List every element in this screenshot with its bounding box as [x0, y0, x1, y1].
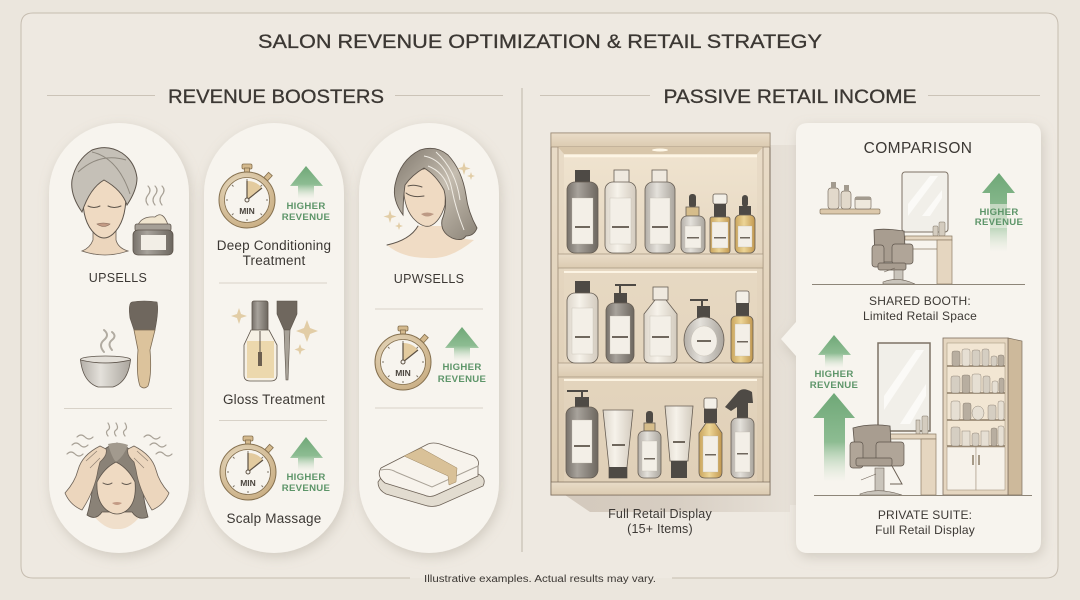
icon: stopwatch three	[375, 326, 431, 390]
icon: higher revenue arrow one: REVENUE	[282, 212, 331, 223]
icon: higher revenue arrow one: HIGHER	[286, 201, 326, 212]
icon: higher revenue arrow upper, private suite	[810, 335, 859, 391]
label: upsells variant: UPWSELLS	[394, 272, 464, 286]
label: shared booth: SHARED BOOTH:	[869, 294, 971, 308]
panel: comparison	[781, 123, 1041, 553]
heading: passive retail income: PASSIVE RETAIL INCOME	[664, 86, 916, 108]
retail shelf display	[551, 133, 770, 495]
icon: stopwatch two: MIN	[240, 478, 256, 488]
label: full retail display: Full Retail Display	[608, 507, 712, 521]
icon: higher revenue arrow three	[438, 327, 487, 385]
panel: upsells column three	[359, 123, 499, 553]
icon: stopwatch two	[220, 436, 276, 500]
products: top shelf	[567, 170, 755, 253]
label: gloss treatment: Gloss Treatment	[223, 392, 325, 407]
label: shared booth	[863, 294, 977, 323]
label: deep conditioning: Deep Conditioning	[217, 238, 331, 253]
icon: higher revenue arrow two	[282, 437, 331, 494]
icon: scalp massage	[65, 423, 172, 529]
label: upsells: UPSELLS	[89, 271, 147, 285]
title: SALON REVENUE OPTIMIZATION & RETAIL STRATEGY	[258, 31, 822, 53]
icon: stopwatch one: MIN	[239, 206, 255, 216]
label: private suite: Full Retail Display	[875, 523, 975, 537]
icon: higher revenue arrow, shared booth: REVENUE	[975, 217, 1024, 228]
label: shared booth: Limited Retail Space	[863, 309, 977, 323]
panel: treatments column two	[204, 123, 344, 553]
icon: higher revenue arrow one	[282, 166, 331, 223]
heading: revenue boosters: REVENUE BOOSTERS	[168, 86, 384, 108]
label: full retail display	[608, 507, 712, 536]
icon: higher revenue arrow three: HIGHER	[442, 362, 482, 373]
retail cabinet	[943, 338, 1022, 495]
icon: higher revenue arrow, shared booth: HIGHER	[979, 207, 1019, 218]
scene: shared booth	[812, 172, 1025, 284]
icon: higher revenue arrow upper, private suite: REVENUE	[810, 380, 859, 391]
label: private suite	[875, 508, 975, 537]
icon: woman with towel turban	[72, 148, 173, 255]
icon: stopwatch three: MIN	[395, 368, 411, 378]
products: middle shelf	[567, 281, 753, 363]
icon: higher revenue arrow two: HIGHER	[286, 472, 326, 483]
panel: treatments column two: Treatment	[243, 253, 305, 268]
icon: gloss bottle and tint brush	[231, 301, 318, 381]
scene: private suite	[814, 338, 1032, 496]
icon: higher revenue arrow upper, private suite: HIGHER	[814, 369, 854, 380]
label: full retail display: (15+ Items)	[627, 522, 693, 536]
heading: comparison: COMPARISON	[864, 140, 972, 157]
icon: tall higher revenue arrow	[813, 393, 855, 482]
footer note: Illustrative examples. Actual results may vary.	[424, 574, 656, 585]
icon: higher revenue arrow three: REVENUE	[438, 374, 487, 385]
icon: folded towel	[378, 443, 484, 506]
label: scalp massage: Scalp Massage	[227, 511, 321, 526]
products: bottom shelf	[566, 389, 754, 478]
icon: stopwatch one	[219, 164, 275, 228]
shelf shadow	[565, 145, 798, 512]
label: private suite: PRIVATE SUITE:	[878, 508, 972, 522]
icon: bowl and brush	[80, 301, 158, 388]
icon: higher revenue arrow, shared booth	[975, 173, 1024, 252]
icon: higher revenue arrow two: REVENUE	[282, 483, 331, 494]
icon: woman with glossy hair	[384, 148, 477, 258]
panel: upsells column one	[49, 123, 189, 553]
